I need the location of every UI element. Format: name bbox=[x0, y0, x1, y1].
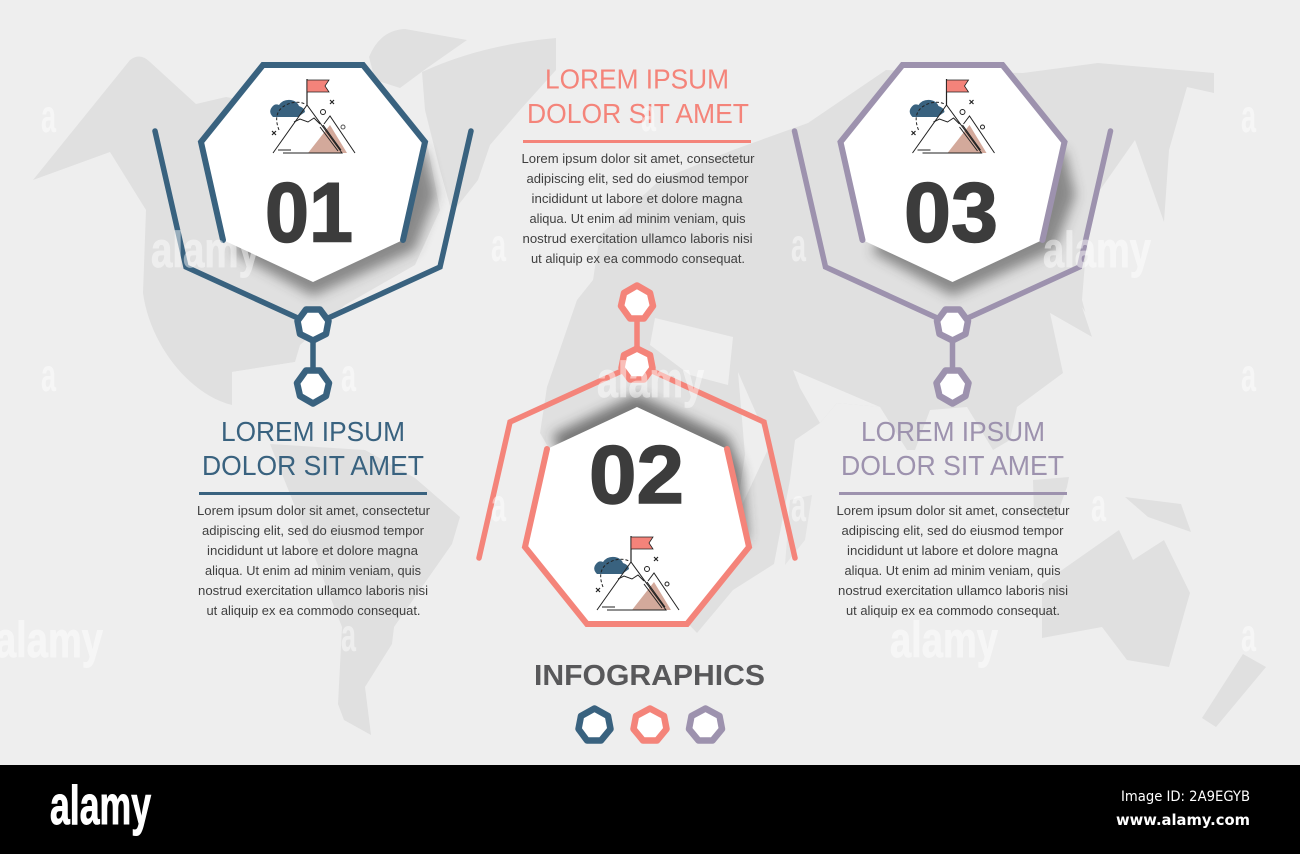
heading 03: LOREM IPSUM bbox=[861, 416, 1045, 447]
body text: nostrud exercitation ullamco laboris nisi bbox=[198, 583, 428, 598]
heptagon fill 02 bbox=[525, 407, 749, 624]
world map bbox=[33, 29, 1266, 735]
body text bbox=[522, 151, 755, 266]
footer band bbox=[0, 765, 1300, 854]
body text: incididunt ut labore et dolore magna bbox=[207, 543, 419, 558]
node top 01 bbox=[298, 310, 328, 340]
rule bbox=[523, 140, 751, 143]
heading 01 bbox=[202, 416, 424, 481]
rule bbox=[839, 492, 1067, 495]
heading 01: LOREM IPSUM bbox=[221, 416, 405, 447]
body text: Lorem ipsum dolor sit amet, consectetur bbox=[522, 151, 755, 166]
watermarks: a bbox=[341, 609, 356, 661]
text block: right bbox=[836, 416, 1070, 618]
node top 02 bbox=[621, 286, 653, 318]
image id: Image ID: 2A9EGYB bbox=[1121, 789, 1250, 805]
node bottom 03 bbox=[936, 370, 968, 404]
map gaps bbox=[232, 307, 1100, 520]
watermarks: alamy bbox=[151, 222, 260, 278]
rule bbox=[199, 492, 427, 495]
body text: aliqua. Ut enim ad minim veniam, quis bbox=[844, 563, 1061, 578]
heading 02: DOLOR SIT AMET bbox=[527, 98, 749, 129]
outer bracket 01 bbox=[155, 131, 471, 325]
text block: left bbox=[197, 416, 431, 618]
heptagon outline 03 bbox=[840, 65, 1064, 240]
icon: mountain flag 01 bbox=[270, 79, 355, 153]
title: INFOGRAPHICS bbox=[534, 660, 765, 692]
icon: mountain flag 03 bbox=[910, 79, 994, 153]
body text: adipiscing elit, sed do eiusmod tempor bbox=[526, 171, 749, 186]
watermarks: a bbox=[641, 89, 656, 141]
connector 02 bbox=[634, 317, 640, 349]
number 03: 03 bbox=[904, 166, 998, 260]
body text: adipiscing elit, sed do eiusmod tempor bbox=[842, 523, 1064, 538]
legend salmon bbox=[634, 708, 666, 740]
watermarks: a bbox=[791, 219, 806, 271]
body text: ut aliquip ex ea commodo consequat. bbox=[206, 603, 420, 618]
connector 03 bbox=[950, 340, 955, 372]
footer logo: alamy bbox=[50, 774, 151, 836]
shadow 01 bbox=[232, 150, 436, 296]
body text bbox=[836, 503, 1070, 618]
body text: Lorem ipsum dolor sit amet, consectetur bbox=[836, 503, 1070, 518]
outer bracket 03 bbox=[794, 131, 1110, 325]
heptagon fill 01 bbox=[201, 65, 425, 282]
website: www.alamy.com bbox=[1116, 811, 1250, 829]
number 02: 02 bbox=[589, 428, 684, 521]
node bottom 01 bbox=[297, 370, 329, 404]
outer bracket 02 bbox=[479, 364, 795, 558]
body text: nostrud exercitation ullamco laboris nisi bbox=[838, 583, 1068, 598]
panel 02 bbox=[479, 286, 795, 624]
shadow 02 bbox=[552, 394, 748, 540]
number 01: 01 bbox=[265, 166, 353, 260]
heading 01: DOLOR SIT AMET bbox=[202, 450, 424, 481]
panel 01 bbox=[155, 65, 471, 404]
watermarks: a bbox=[41, 349, 56, 401]
heptagon fill 03 bbox=[840, 65, 1064, 282]
watermarks: alamy bbox=[1043, 222, 1151, 278]
watermarks: a bbox=[491, 219, 506, 271]
heptagon outline 01 bbox=[201, 65, 425, 240]
body text: aliqua. Ut enim ad minim veniam, quis bbox=[205, 563, 421, 578]
heading 03 bbox=[841, 416, 1064, 481]
watermarks: alamy bbox=[597, 352, 704, 408]
shadow 03 bbox=[872, 150, 1076, 296]
watermarks bbox=[0, 89, 1256, 668]
node bottom 02 bbox=[622, 348, 652, 380]
body text: aliqua. Ut enim ad minim veniam, quis bbox=[530, 211, 746, 226]
connector 01 bbox=[310, 340, 316, 372]
watermarks: a bbox=[41, 90, 56, 142]
watermarks: alamy bbox=[890, 612, 998, 668]
heading 03: DOLOR SIT AMET bbox=[841, 450, 1064, 481]
text block: top centre bbox=[522, 64, 755, 266]
watermarks: a bbox=[491, 479, 506, 531]
heptagon outline 02 bbox=[525, 449, 749, 624]
legend purple bbox=[689, 708, 722, 740]
body text bbox=[197, 503, 431, 618]
body text: incididunt ut labore et dolore magna bbox=[532, 191, 743, 206]
watermarks: a bbox=[1241, 90, 1256, 142]
heading 02: LOREM IPSUM bbox=[545, 64, 729, 94]
watermarks: a bbox=[791, 479, 806, 531]
watermarks: a bbox=[1241, 349, 1256, 401]
body text: ut aliquip ex ea commodo consequat. bbox=[531, 251, 745, 266]
node top 03 bbox=[937, 310, 968, 340]
watermarks: a bbox=[1091, 479, 1106, 531]
panel 03 bbox=[794, 65, 1110, 404]
body text: ut aliquip ex ea commodo consequat. bbox=[846, 603, 1060, 618]
legend blue bbox=[578, 708, 610, 740]
heading 02 bbox=[527, 64, 749, 129]
body text: Lorem ipsum dolor sit amet, consectetur bbox=[197, 503, 431, 518]
watermarks: a bbox=[341, 349, 356, 401]
body text: incididunt ut labore et dolore magna bbox=[847, 543, 1059, 558]
watermarks: a bbox=[1241, 609, 1256, 661]
body text: adipiscing elit, sed do eiusmod tempor bbox=[202, 523, 425, 538]
icon: mountain flag 02 bbox=[594, 536, 679, 610]
legend bbox=[578, 708, 722, 740]
body text: nostrud exercitation ullamco laboris nisi bbox=[522, 231, 753, 246]
